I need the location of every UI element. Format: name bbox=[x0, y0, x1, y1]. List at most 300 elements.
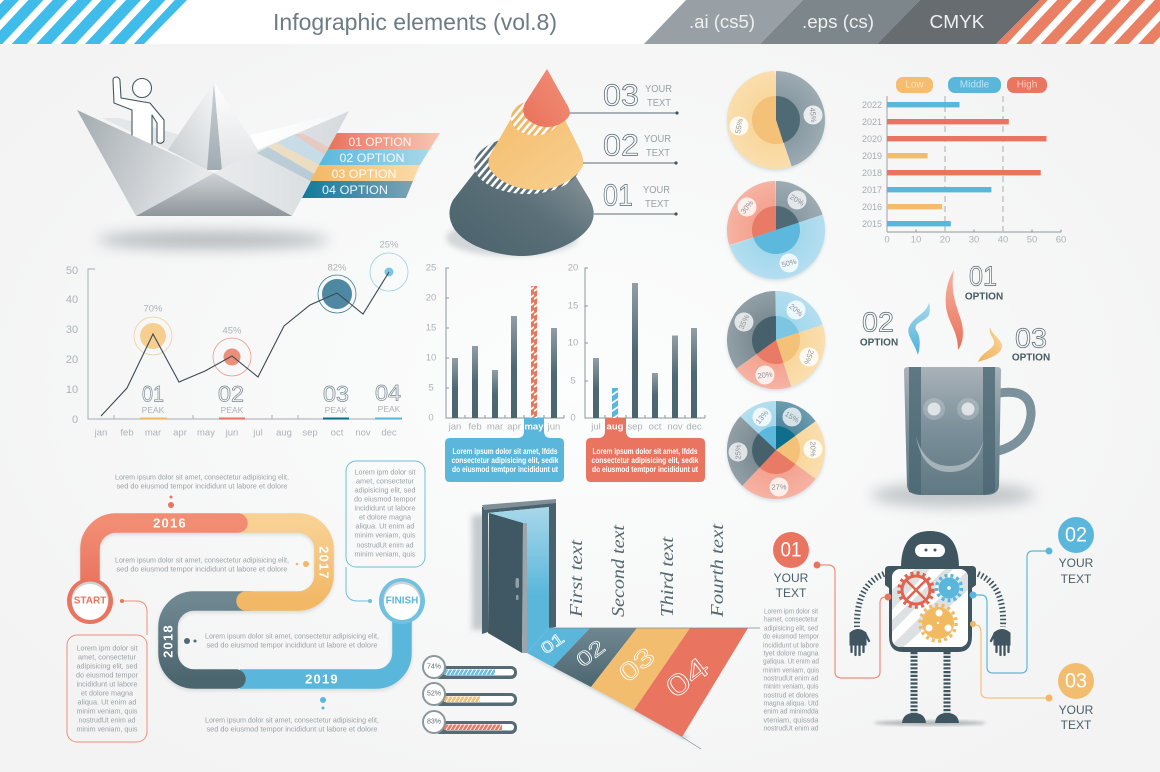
glass screen bbox=[892, 569, 968, 650]
value axis labels: 20 bbox=[940, 234, 950, 246]
year labels: 2018 bbox=[160, 624, 176, 658]
callout text: Lorem ipsum dolor sit amet, lfdds bbox=[592, 446, 698, 456]
start node: START bbox=[74, 596, 106, 606]
month labels: jan bbox=[448, 422, 461, 432]
head bbox=[901, 531, 959, 568]
pie 4 labels: 25% bbox=[734, 444, 742, 460]
blue note box: et dolore magna bbox=[359, 512, 411, 522]
blue note box: amet, consectetur bbox=[356, 476, 415, 486]
y axis labels: 30 bbox=[66, 324, 78, 336]
mug shadow bbox=[871, 483, 1035, 507]
door edge bbox=[522, 523, 527, 653]
peak labels bbox=[142, 380, 401, 415]
badge 03: 03 bbox=[1065, 670, 1087, 692]
step captions: Third text bbox=[657, 536, 677, 617]
robot side text: minim veniam, quis bbox=[764, 682, 819, 690]
y labels: 25 bbox=[426, 262, 436, 274]
badge 02 bbox=[1058, 517, 1094, 586]
y axis labels bbox=[66, 265, 78, 426]
year labels: 2015 bbox=[862, 219, 882, 229]
y labels: 5 bbox=[428, 382, 434, 394]
hatch under middle layer bbox=[474, 136, 580, 194]
y axis labels: 0 bbox=[72, 414, 78, 426]
label 02 bbox=[583, 128, 678, 165]
y axis labels: 10 bbox=[66, 384, 78, 396]
y labels bbox=[568, 262, 578, 424]
label 02: 02 bbox=[603, 128, 639, 162]
peak 4 circle: 25% bbox=[379, 240, 399, 250]
robot side text: adipisicing elit, sed bbox=[764, 624, 818, 632]
paper boat with options bbox=[77, 77, 440, 249]
floor step 02: 02 bbox=[572, 636, 610, 672]
pie 4 labels: 20% bbox=[808, 441, 818, 457]
steam: red bbox=[946, 270, 963, 350]
year labels: 2016 bbox=[153, 516, 187, 530]
label 02: TEXT bbox=[646, 147, 671, 159]
red note box bbox=[67, 599, 147, 742]
robot side text: enim ad minimdda bbox=[764, 706, 818, 716]
format tab: eps bbox=[760, 0, 920, 44]
y axis labels: 50 bbox=[66, 265, 78, 277]
pie 3 labels: 35% bbox=[737, 313, 751, 331]
label 01 bbox=[594, 178, 678, 216]
robot side text: nostrudUt enim ad bbox=[764, 674, 818, 682]
option 04: 04 OPTION bbox=[322, 183, 388, 197]
blue note box: Lorem ipm dolor sit bbox=[354, 468, 416, 476]
robot side text: hamet, consectetur bbox=[764, 614, 819, 624]
format tab: ai bbox=[644, 0, 803, 44]
steam: yellow bbox=[978, 327, 1002, 362]
right hull white tip bbox=[250, 111, 349, 150]
progress 83%: 83% bbox=[427, 718, 441, 726]
boat shadow bbox=[97, 231, 329, 249]
format tab: CMYK: CMYK bbox=[930, 12, 984, 32]
value axis labels: 30 bbox=[969, 234, 979, 246]
red note box: adipisicing elit, sed bbox=[76, 662, 138, 670]
month labels bbox=[590, 422, 702, 432]
red segment 2016 bbox=[90, 523, 238, 590]
badge 02: TEXT bbox=[1061, 572, 1092, 586]
door shadow bbox=[472, 515, 486, 630]
label 03: 03 bbox=[1015, 322, 1047, 354]
pie 2 labels bbox=[738, 190, 806, 272]
pie 4: 15 / 20 / 27 / 25 / 13 bbox=[727, 401, 825, 501]
eye visor bbox=[915, 544, 945, 557]
body bbox=[885, 566, 976, 652]
door frame bbox=[482, 501, 556, 634]
floor step 04 bbox=[634, 628, 748, 737]
label 03: YOUR bbox=[645, 83, 672, 95]
pie 2 labels: 20% bbox=[788, 192, 806, 208]
badge 03: YOUR bbox=[1059, 703, 1094, 717]
left hull bbox=[77, 110, 214, 216]
peak labels: PEAK bbox=[378, 404, 401, 414]
arms bbox=[857, 574, 1003, 627]
door handle bbox=[516, 578, 519, 600]
pie 3 labels: 20% bbox=[787, 302, 805, 318]
text above 2016 bbox=[115, 472, 289, 508]
centre peak right bbox=[214, 82, 258, 170]
label 01: YOUR bbox=[643, 184, 670, 196]
badge 01: 01 bbox=[780, 538, 802, 562]
year labels bbox=[862, 100, 882, 229]
option 01 bbox=[328, 133, 440, 149]
title: Infographic elements (vol.8) bbox=[273, 9, 557, 35]
yellow middle layer bbox=[488, 117, 583, 190]
year labels: 2017 bbox=[862, 185, 882, 195]
left blue stripes bbox=[0, 0, 187, 44]
peak 1 circle: 70% bbox=[143, 304, 163, 314]
label 02 bbox=[860, 306, 898, 348]
winding timeline 2016-2019 bbox=[67, 461, 425, 742]
text by 2018 bbox=[184, 632, 379, 650]
blue note box: minim veniam, quis bbox=[354, 550, 416, 558]
option 02: 02 OPTION bbox=[340, 151, 404, 165]
label 01: TEXT bbox=[645, 198, 670, 210]
floor step 02 bbox=[553, 628, 637, 687]
value axis labels: 40 bbox=[998, 234, 1008, 246]
peak 1 circle bbox=[134, 304, 172, 355]
red note box: do eiusmod tempor bbox=[76, 670, 139, 680]
label 01: OPTION bbox=[965, 292, 1003, 302]
robot side text: vteniam, quissda bbox=[764, 716, 818, 724]
red gear bbox=[899, 573, 933, 607]
badge 02: YOUR bbox=[1059, 556, 1094, 570]
smiling mug with steam bbox=[860, 260, 1050, 507]
pie 1 labels: 55% bbox=[733, 118, 745, 134]
connector 03 bbox=[970, 621, 1052, 702]
door leaf bbox=[488, 513, 523, 653]
year labels: 2016 bbox=[862, 202, 882, 212]
robot side text: nostrudUt enim ad bbox=[764, 724, 818, 732]
text below 2019: Lorem ipsum dolor sit amet, consectetur adipisicing elit, bbox=[205, 716, 379, 724]
badge 03 bbox=[1058, 663, 1094, 732]
callout text: do eiusmod temtpor incididunt ut bbox=[592, 464, 698, 474]
floor shadow bbox=[527, 655, 690, 739]
bars bbox=[452, 286, 557, 418]
month labels: sep bbox=[302, 428, 318, 438]
callout with tab bbox=[445, 418, 564, 482]
robot with gears bbox=[763, 517, 1094, 732]
pie 3 labels: 20% bbox=[757, 369, 773, 381]
month labels: mar bbox=[487, 422, 503, 432]
text by 2017: sed do eiusmod tempor incididunt ut labore et dolore bbox=[116, 564, 288, 574]
month labels: may bbox=[197, 428, 215, 438]
left hand bbox=[850, 630, 869, 655]
badge 03: TEXT bbox=[1061, 718, 1092, 732]
robot side text: incididunt ut labore bbox=[763, 640, 819, 650]
text by 2017 bbox=[115, 556, 309, 574]
pie 4 labels: 27% bbox=[771, 482, 787, 492]
badge 01: YOUR bbox=[774, 571, 809, 585]
label 02: YOUR bbox=[644, 133, 671, 145]
blue note box: incididunt ut labore bbox=[354, 504, 416, 512]
blue note box: do eiusmod tempor bbox=[354, 494, 417, 504]
red note box: minim veniam, quis bbox=[76, 724, 138, 734]
label 01 bbox=[965, 260, 1003, 302]
progress bars bbox=[423, 656, 517, 734]
peak labels: 03 bbox=[323, 382, 349, 406]
peak labels: PEAK bbox=[142, 405, 165, 415]
legend pills: Low bbox=[905, 80, 924, 90]
red note box: incididunt ut labore bbox=[76, 680, 138, 688]
pie 4 labels bbox=[728, 408, 822, 496]
cone shadow bbox=[446, 220, 578, 256]
month labels: apr bbox=[173, 428, 187, 438]
red note box: et dolore magna bbox=[81, 688, 133, 698]
text below 2019: sed do eiusmod tempor incididunt ut labore et dolore bbox=[206, 724, 378, 734]
callout text bbox=[452, 446, 559, 474]
option 01: 01 OPTION bbox=[348, 135, 412, 149]
pie 2 labels: 50% bbox=[781, 257, 798, 269]
y labels bbox=[426, 262, 436, 424]
badge 01: TEXT bbox=[776, 586, 807, 600]
blue segment 2019 bbox=[240, 615, 402, 679]
value axis labels: 10 bbox=[911, 234, 921, 246]
legend pills bbox=[896, 77, 1047, 93]
finish node: FINISH bbox=[386, 596, 418, 606]
value axis labels: 50 bbox=[1027, 234, 1037, 246]
mug smile bbox=[916, 436, 984, 472]
pie 4 labels: 13% bbox=[754, 408, 770, 426]
robot side text: do eiusmod tempor bbox=[763, 632, 820, 640]
y labels: 10 bbox=[426, 352, 436, 364]
text by 2017: Lorem ipsum dolor sit amet, consectetur adipisicing elit, bbox=[115, 556, 289, 564]
month labels: aug bbox=[276, 428, 292, 438]
hull bottom bbox=[136, 173, 292, 216]
hatch under top layer bbox=[511, 100, 559, 136]
label 03 bbox=[1012, 322, 1050, 364]
right hull bbox=[214, 111, 349, 216]
callout text: consectetur adipisicing elit, sedik bbox=[592, 455, 699, 465]
month labels: aug bbox=[607, 422, 624, 432]
pie 3 labels: 25% bbox=[802, 348, 816, 366]
callout text: consectetur adipisicing elit, sedik bbox=[452, 455, 559, 465]
option ribbons across the hull bbox=[257, 134, 328, 182]
peak 2 circle bbox=[213, 326, 251, 376]
text by 2018: sed do eiusmod tempor incididunt ut labore et dolore bbox=[206, 640, 378, 650]
feet bbox=[902, 713, 959, 723]
yellow gear bbox=[920, 605, 956, 641]
peak labels: 02 bbox=[218, 382, 244, 406]
option 04 bbox=[302, 181, 413, 198]
month labels: oct bbox=[331, 428, 344, 438]
progress 52%: 52% bbox=[427, 690, 441, 698]
blue note box bbox=[346, 461, 425, 603]
y labels: 5 bbox=[570, 376, 576, 386]
callout text: do eiusmod temtpor incididunt ut bbox=[452, 464, 558, 474]
month labels: sep bbox=[627, 422, 643, 432]
y labels: 0 bbox=[570, 412, 576, 424]
robot side text: nostrud et dolores bbox=[764, 690, 819, 700]
month labels: jun bbox=[225, 428, 238, 438]
badge 01 bbox=[773, 532, 809, 600]
blue gear bbox=[936, 576, 962, 600]
label 01: 01 bbox=[969, 260, 997, 292]
header bar bbox=[0, 0, 1160, 44]
y labels: 15 bbox=[426, 322, 436, 334]
month labels: dec bbox=[381, 428, 397, 438]
red note box: minim veniam, quis bbox=[76, 706, 138, 716]
text below 2019 bbox=[205, 697, 379, 734]
y axis labels: 20 bbox=[66, 354, 78, 366]
pie 4 labels: 15% bbox=[783, 409, 801, 425]
red note box: amet, consectetur bbox=[78, 652, 137, 662]
centre peak left bbox=[168, 82, 214, 170]
pie 1 labels bbox=[730, 106, 822, 136]
month labels: jun bbox=[547, 422, 560, 432]
blue note box: nostrudUt enim ad bbox=[356, 540, 414, 550]
label 03: OPTION bbox=[1012, 352, 1050, 364]
month labels: feb bbox=[468, 422, 482, 432]
pie 3: 20 / 25 / 20 / 35 bbox=[727, 291, 825, 391]
robot shadow bbox=[874, 720, 986, 726]
year labels: 2018 bbox=[862, 168, 882, 178]
pie 1 labels: 45% bbox=[808, 107, 818, 123]
label 02: OPTION bbox=[860, 338, 898, 348]
floor step 01: 01 bbox=[538, 630, 568, 658]
red note box: aliqua. Ut enim ad bbox=[78, 698, 136, 706]
label 01: 01 bbox=[603, 178, 633, 212]
peak 2 circle: 45% bbox=[222, 326, 242, 336]
format tab: ai: .ai (cs5) bbox=[689, 12, 755, 32]
month labels bbox=[94, 428, 397, 438]
bar chart jan-jun bbox=[426, 262, 564, 482]
month labels: dec bbox=[686, 422, 702, 432]
step captions: Fourth text bbox=[707, 523, 727, 618]
month labels: may bbox=[524, 422, 544, 432]
doorway glow bbox=[488, 507, 549, 653]
data line bbox=[101, 272, 389, 416]
month labels: apr bbox=[507, 422, 521, 432]
layered cone chart bbox=[446, 69, 679, 256]
year labels: 2020 bbox=[862, 134, 882, 144]
value axis labels bbox=[884, 234, 1066, 246]
floor step 04: 04 bbox=[660, 651, 716, 705]
y labels: 10 bbox=[568, 338, 578, 348]
peak labels: 01 bbox=[142, 382, 164, 406]
text by 2018: Lorem ipsum dolor sit amet, consectetur adipisicing elit, bbox=[205, 632, 379, 640]
month labels: jan bbox=[94, 428, 107, 438]
y axis labels: 40 bbox=[66, 294, 78, 306]
robot side text bbox=[763, 606, 820, 732]
month labels: nov bbox=[667, 422, 683, 432]
horizontal bar chart bbox=[862, 77, 1066, 246]
month labels: nov bbox=[355, 428, 371, 438]
text above 2016: Lorem ipsum dolor sit amet, consectetur adipisicing elit, bbox=[115, 472, 289, 482]
blue note box: minim veniam, quis bbox=[354, 530, 416, 540]
format tab: eps: .eps (cs) bbox=[802, 12, 874, 32]
month labels: feb bbox=[120, 428, 134, 438]
pie 2 labels: 30% bbox=[739, 198, 755, 216]
floor step 01 bbox=[527, 628, 590, 667]
waving man icon bbox=[113, 77, 164, 150]
format tab: CMYK bbox=[877, 0, 1040, 44]
month labels: oct bbox=[649, 422, 662, 432]
legs bbox=[914, 652, 947, 714]
peak 3 circle bbox=[318, 262, 356, 313]
year labels: 2019 bbox=[862, 151, 882, 161]
label 03: TEXT bbox=[647, 97, 672, 109]
yellow segment 2017 bbox=[240, 523, 324, 601]
option 03 bbox=[310, 165, 420, 181]
red note box: Lorem ipm dolor sit bbox=[76, 644, 138, 652]
month labels: mar bbox=[145, 428, 161, 438]
red top layer bbox=[523, 69, 570, 127]
peak markers on baseline bbox=[140, 418, 402, 420]
callout with tab bbox=[586, 418, 705, 482]
callout text bbox=[592, 446, 699, 474]
robot side text: magna aliqua. Utd bbox=[764, 698, 818, 708]
peak labels: PEAK bbox=[221, 405, 244, 415]
month labels bbox=[448, 422, 560, 432]
y labels: 20 bbox=[568, 262, 578, 274]
robot side text: tyet dolore magna bbox=[764, 648, 818, 658]
pie 1: 55 / 45 bbox=[727, 71, 825, 171]
back sail fold bbox=[102, 118, 180, 150]
year labels bbox=[153, 516, 339, 686]
progress 74%: 74% bbox=[427, 664, 441, 670]
legend pills: Middle bbox=[960, 80, 990, 90]
badge 02: 02 bbox=[1065, 524, 1087, 546]
robot side text: minim veniam, quis bbox=[763, 666, 819, 674]
steam: blue bbox=[908, 303, 930, 355]
robot side text: Lorem ipm dolor sit bbox=[764, 606, 818, 616]
step captions: Second text bbox=[608, 524, 628, 617]
right hand bbox=[991, 630, 1010, 655]
blue note box: aliqua. Ut enim ad bbox=[356, 522, 414, 530]
blue note box: adipisicing elit, sed bbox=[354, 486, 416, 494]
callout text: Lorem ipsum dolor sit amet, lfdds bbox=[452, 446, 558, 456]
peak labels: 04 bbox=[375, 380, 401, 406]
axes bbox=[446, 268, 564, 418]
label 03 bbox=[570, 78, 679, 115]
start node bbox=[67, 578, 113, 624]
peak labels: PEAK bbox=[325, 405, 348, 415]
option 03: 03 OPTION bbox=[332, 167, 396, 181]
value axis labels: 60 bbox=[1056, 234, 1066, 246]
mug handle bbox=[998, 392, 1031, 451]
connector 02 bbox=[970, 548, 1052, 673]
year labels: 2019 bbox=[305, 672, 339, 686]
month labels: jul bbox=[252, 428, 263, 438]
slate segment 2018 bbox=[168, 601, 250, 679]
year labels: 2017 bbox=[316, 546, 332, 580]
floor step 03 bbox=[591, 628, 690, 710]
finish node bbox=[379, 578, 425, 624]
track shadow bbox=[90, 525, 402, 681]
y labels: 20 bbox=[426, 292, 436, 304]
pie 2: 20 / 50 / 30 bbox=[727, 181, 825, 281]
floor step 03: 03 bbox=[613, 642, 661, 688]
right orange stripes bbox=[996, 0, 1160, 44]
open door with four-step floor bbox=[472, 499, 760, 749]
mug dark bands bbox=[909, 367, 995, 495]
connector 01 bbox=[814, 562, 892, 678]
peak 3 circle: 82% bbox=[327, 262, 347, 274]
step captions: First text bbox=[566, 539, 586, 618]
bars bbox=[593, 283, 697, 418]
peak 4 circle bbox=[370, 240, 408, 291]
year labels: 2022 bbox=[862, 100, 882, 110]
option 02 bbox=[319, 149, 430, 165]
axes bbox=[585, 268, 705, 418]
peak line chart bbox=[66, 240, 408, 438]
axes bbox=[88, 269, 402, 419]
label 03: 03 bbox=[603, 78, 639, 112]
mug body bbox=[904, 367, 1001, 495]
label 02: 02 bbox=[862, 306, 894, 338]
